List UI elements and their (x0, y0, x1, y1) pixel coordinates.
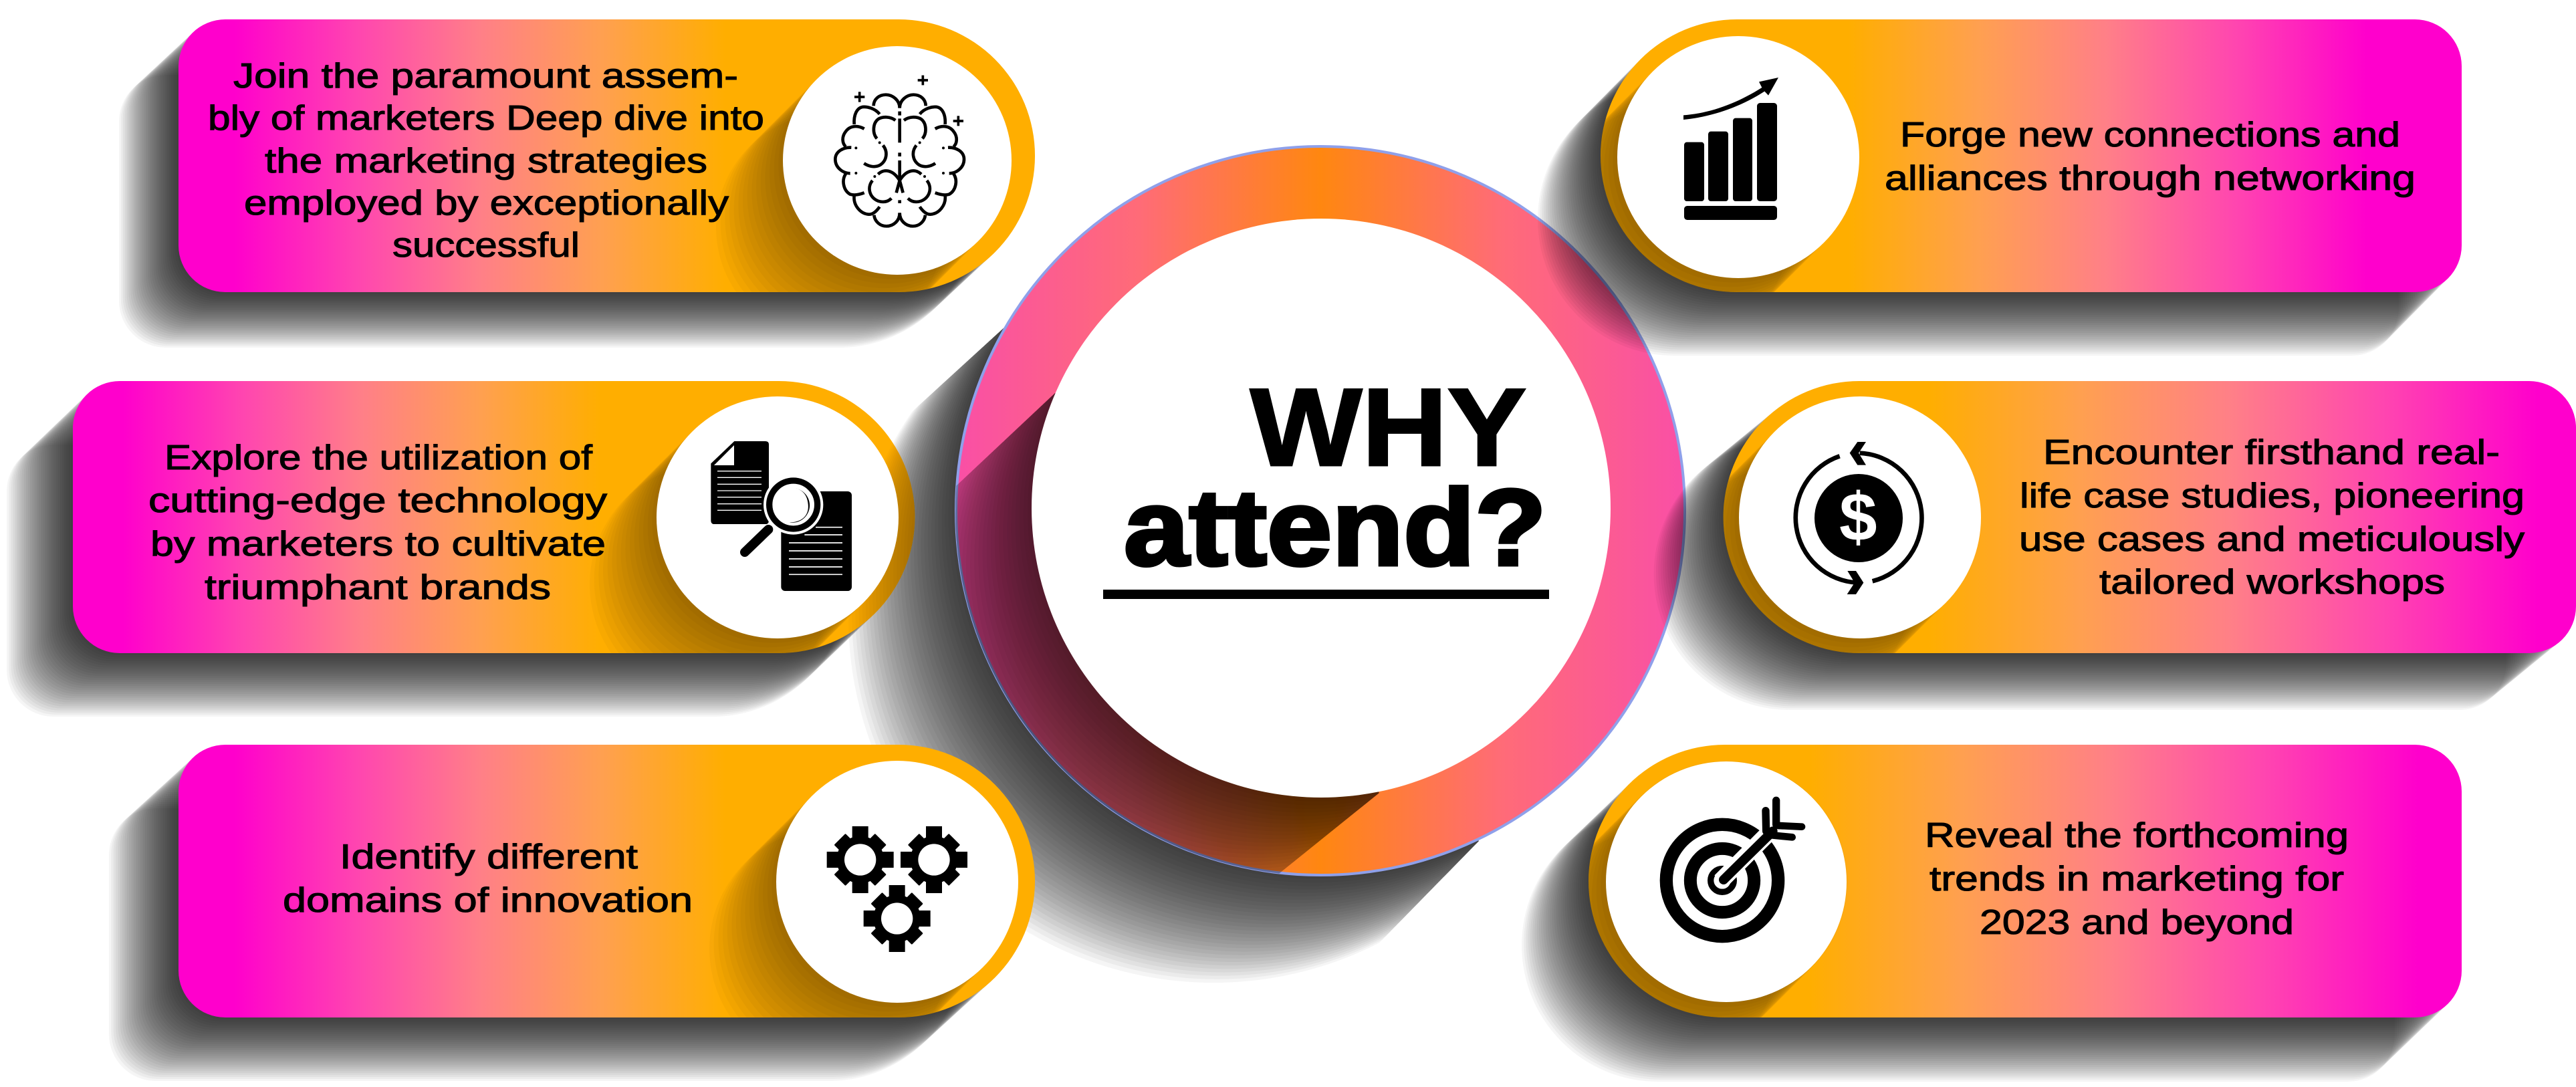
pill background (179, 19, 1035, 292)
icon disc shadow (721, 85, 973, 292)
title: WHY (1250, 366, 1526, 489)
panel shadow (1538, 19, 2462, 356)
text block: tailored workshops (2099, 563, 2445, 602)
icon disc shadow (1672, 396, 1981, 705)
panel: case studies (1654, 381, 2576, 710)
outer ring (956, 146, 1685, 875)
text block: Encounter firsthand real- (2043, 433, 2500, 472)
text block: Join the paramount assem- (233, 57, 738, 96)
panel: domains of innovation (109, 745, 1035, 1081)
panel: networking (1538, 19, 2462, 356)
title: attend? (1124, 467, 1546, 588)
text block: domains of innovation (283, 881, 693, 920)
icon: dollar cycle: $ (1839, 479, 1877, 555)
text block: trends in marketing for (1929, 860, 2344, 898)
text block: Forge new connections and (1900, 116, 2400, 154)
icon disc shadow (594, 437, 858, 653)
panel shadow (119, 19, 1035, 348)
inner disc shadow on ring (955, 393, 1379, 873)
text block (1925, 816, 2349, 942)
text block: Identify different (340, 838, 638, 876)
pill background (1724, 381, 2576, 653)
center shadow falling on ring (852, 445, 915, 631)
text block (283, 838, 693, 920)
text block: bly of marketers Deep dive into (208, 99, 764, 138)
text block (208, 57, 764, 265)
pill background (179, 745, 1035, 1017)
text block: by marketers to cultivate (150, 525, 606, 564)
panel: forthcoming trends (1522, 745, 2462, 1082)
center circle long shadow (849, 328, 1479, 983)
text block: triumphant brands (205, 568, 551, 607)
icon disc (1617, 36, 1859, 278)
panel shadow (1522, 745, 2462, 1082)
icon disc shadow (1538, 761, 1847, 1070)
title (1124, 366, 1546, 588)
panel: cutting-edge technology (7, 381, 915, 717)
pill background (73, 381, 915, 653)
text block: employed by exceptionally (244, 184, 729, 223)
text block (2019, 433, 2525, 602)
icon: brain (835, 76, 964, 226)
icon disc (1739, 396, 1981, 638)
text block (1885, 116, 2416, 198)
inner white disc (1032, 219, 1611, 798)
text block: cutting-edge technology (148, 481, 607, 520)
text block: the marketing strategies (265, 142, 707, 180)
text block: Explore the utilization of (164, 439, 593, 477)
icon disc shadow (714, 802, 977, 1017)
panel shadow (1654, 381, 2576, 710)
icon disc (657, 396, 899, 638)
pill background (1601, 19, 2462, 292)
pill background (1589, 745, 2462, 1017)
icon: target with arrow (1666, 800, 1802, 937)
icon disc (1606, 761, 1847, 1002)
icon: dollar cycle (1796, 442, 1921, 594)
icon disc (783, 46, 1012, 275)
panel shadow (7, 381, 915, 717)
icon: documents and magnifier (711, 441, 852, 591)
text block (148, 439, 607, 607)
center circle (955, 145, 1686, 876)
text block: use cases and meticulously (2019, 520, 2525, 559)
title underline (1103, 590, 1549, 599)
text block: 2023 and beyond (1980, 903, 2294, 942)
icon disc shadow (1550, 36, 1859, 345)
icon: rising bar chart (1683, 78, 1778, 220)
icon disc (776, 761, 1018, 1003)
text block: alliances through networking (1885, 159, 2416, 198)
panel shadow (109, 745, 1035, 1081)
text block: Reveal the forthcoming (1925, 816, 2349, 855)
panel: join the assembly (119, 19, 1035, 348)
text block: successful (392, 226, 580, 265)
text block: life case studies, pioneering (2020, 477, 2525, 515)
icon: gears (827, 826, 967, 952)
